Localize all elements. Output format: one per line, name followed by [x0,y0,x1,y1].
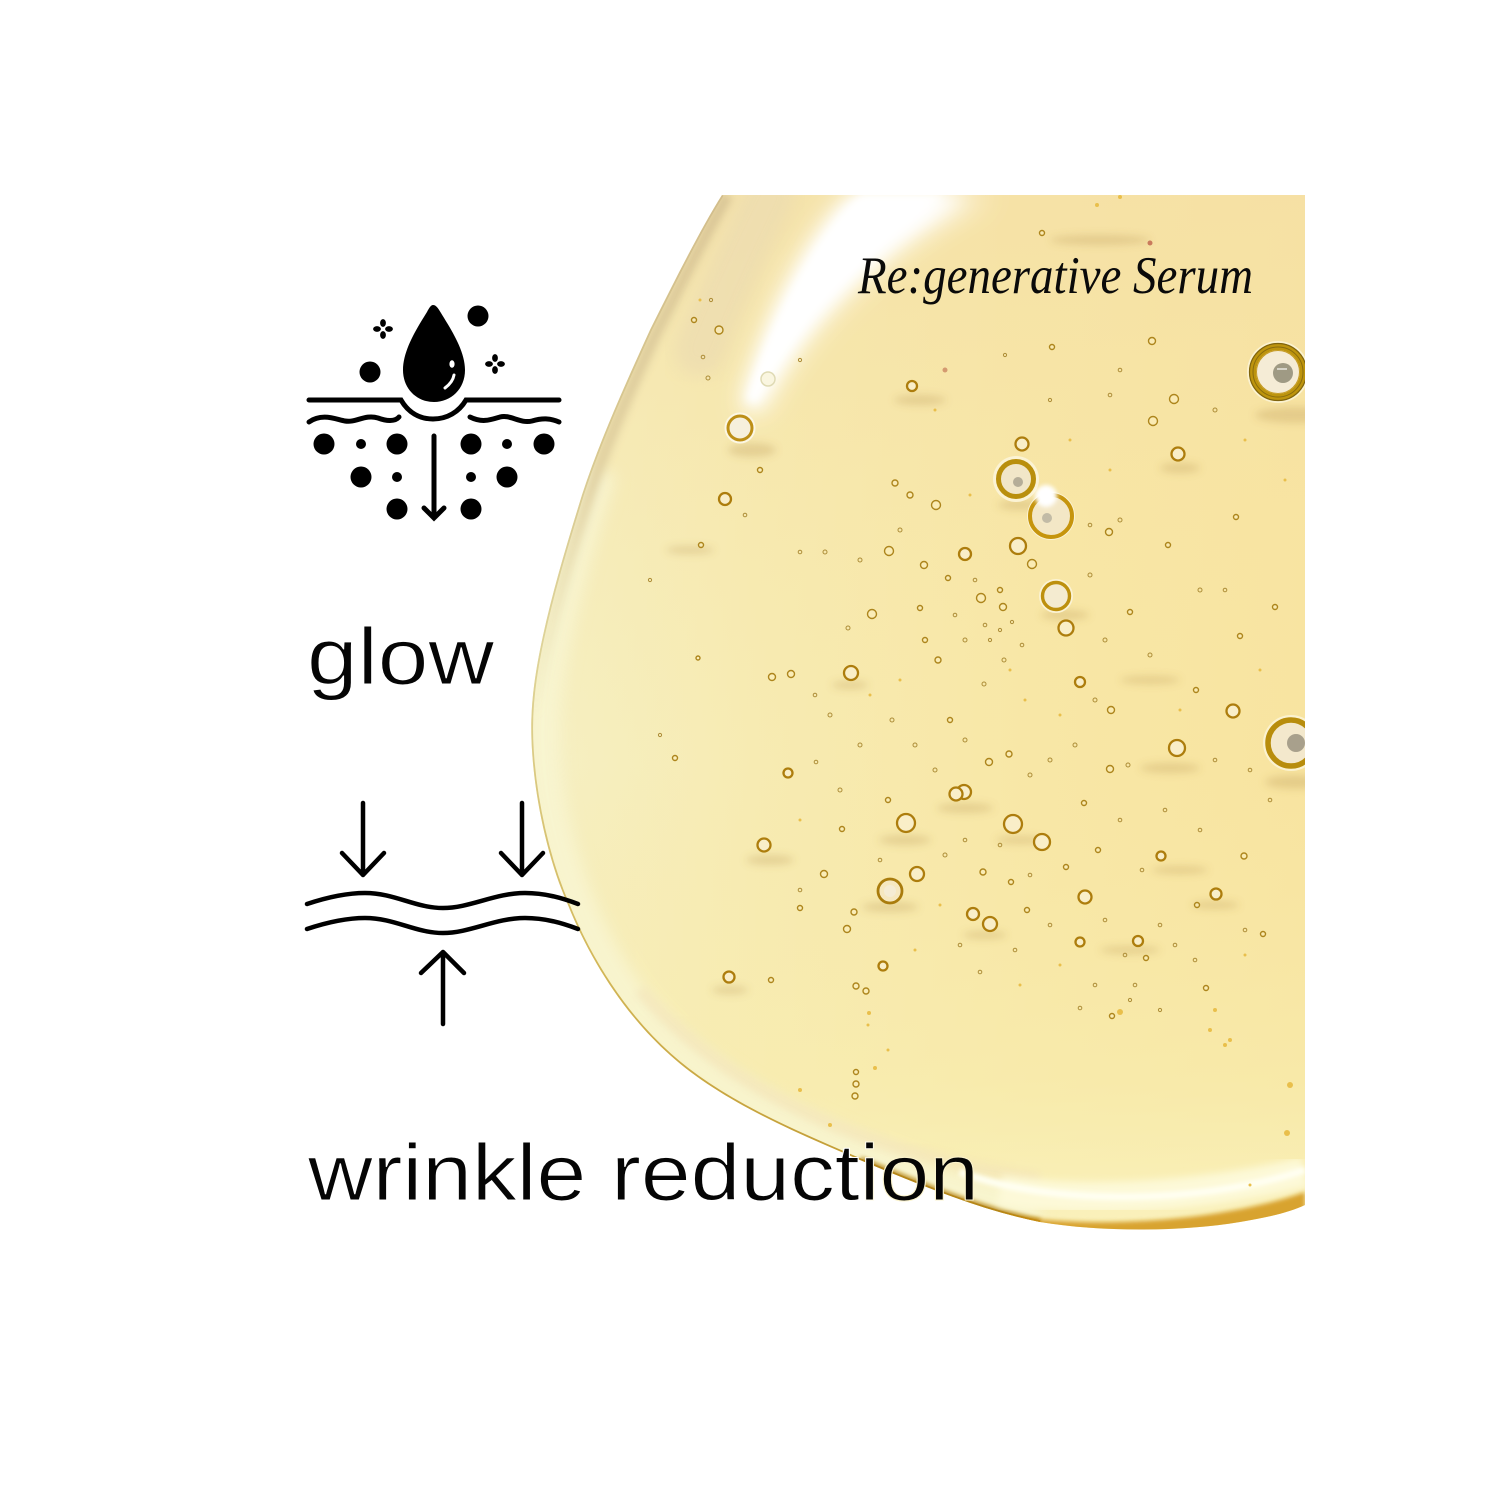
serum swatch [520,190,1335,1240]
tan upper-left edge [544,195,732,654]
label: glow: glow [307,612,494,701]
icon: wrinkle reduction skin lines and arrows [307,803,578,1024]
icon: serum drop absorbing into skin [309,305,559,520]
large bubbles [724,341,1319,903]
bottom light band [1000,1172,1305,1197]
pale rim [543,470,1040,1208]
outline [531,195,1040,1222]
bottom gold edge [1004,1190,1305,1230]
highlight streak [742,195,990,412]
product name: Re:generative Serum [857,247,1253,305]
label: wrinkle reduction: wrinkle reduction [307,1128,979,1217]
medium bubbles [719,381,1240,982]
small bubbles [648,195,1293,1186]
drop shadows [666,235,1335,994]
